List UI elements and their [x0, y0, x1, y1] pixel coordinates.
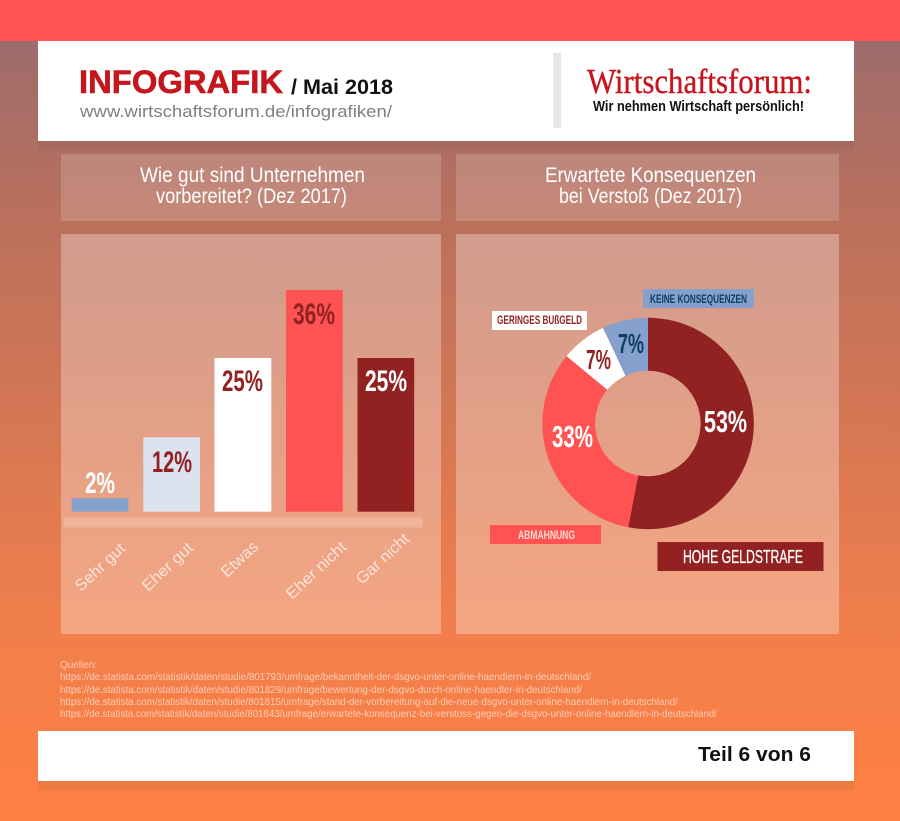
title: INFOGRAFIK [79, 64, 283, 100]
bar: Eher gut [143, 437, 200, 512]
legend: Keine Konsequenzen: KEINE KONSEQUENZEN [650, 292, 747, 306]
axis labels: Eher gut [139, 539, 197, 595]
heading panel: preparedness [61, 154, 441, 221]
footer shadow [38, 781, 854, 790]
logo: Wir nehmen Wirtschaft persönlich! [593, 98, 804, 115]
footer panel [38, 731, 854, 781]
bar: Sehr gut: 2% [85, 467, 115, 500]
website url: www.wirtschaftsforum.de/infografiken/ [79, 102, 392, 121]
value: 33%: 33% [552, 419, 593, 454]
bar: Eher nicht: 36% [293, 298, 335, 331]
footer panel: Teil 6 von 6 [698, 744, 811, 766]
donut segment: Hohe Geldstrafe 53% [628, 318, 754, 529]
header shadow [38, 141, 854, 149]
legend: Abmahnung: ABMAHNUNG [518, 528, 575, 542]
value: 7% white segment: 7% [586, 344, 611, 375]
sources: https://de.statista.com/statistik/daten/studie/801815/umfrage/stand-der-vorbereitung-auf-die-neue-dsgvo-unter-online-haendlern-in-deutschland/ [60, 696, 678, 708]
axis labels: Gar nicht [353, 530, 413, 588]
legend: Hohe Geldstrafe: HOHE GELDSTRAFE [683, 547, 803, 567]
heading panel: preparedness: Wie gut sind Unternehmen [140, 164, 365, 187]
axis labels [72, 530, 413, 603]
sources: https://de.statista.com/statistik/daten/studie/801829/umfrage/bewertung-der-dsgvo-durch-online-haendler-in-deutschland/ [60, 684, 582, 696]
bar: Sehr gut [72, 467, 128, 512]
axis band [64, 518, 422, 528]
bar: Etwas [214, 358, 271, 512]
panel: donut chart [456, 234, 839, 634]
bar: Eher gut: 12% [152, 446, 192, 479]
legend: Hohe Geldstrafe [658, 542, 824, 571]
header panel [38, 41, 854, 141]
donut segment: Abmahnung 33% [542, 356, 638, 527]
heading panel: consequences: Erwartete Konsequenzen [545, 164, 756, 187]
heading panel: consequences: bei Verstoß (Dez 2017) [559, 185, 742, 208]
axis labels: Sehr gut [72, 540, 129, 595]
bar: Eher nicht [286, 290, 343, 512]
logo [587, 62, 812, 115]
donut segment: Keine Konsequenzen 7% [603, 318, 648, 376]
divider [553, 53, 561, 128]
legend: Geringes Bußgeld: GERINGES BUßGELD [497, 313, 582, 327]
heading panel: preparedness: vorbereitet? (Dez 2017) [156, 185, 347, 208]
sources: https://de.statista.com/statistik/daten/studie/801843/umfrage/erwartete-konsequenz-bei-verstoss-gegen-die-dsgvo-unter-online-haendlern-in-deutschland/ [60, 708, 717, 720]
axis labels: Etwas [218, 538, 262, 581]
logo: Wirtschaftsforum: [587, 62, 812, 101]
bar: Gar nicht: 25% [365, 365, 407, 398]
donut segment: Geringes Bußgeld 7% [567, 328, 626, 390]
sources [60, 659, 717, 720]
legend: Abmahnung [490, 525, 601, 544]
bar: Gar nicht [358, 358, 414, 512]
axis labels: Eher nicht [283, 538, 351, 603]
heading panel: consequences [456, 154, 839, 221]
bar: Etwas: 25% [222, 365, 263, 398]
top band [0, 0, 900, 41]
date: / Mai 2018 [291, 76, 393, 99]
panel: bar chart [61, 234, 441, 634]
legend: Keine Konsequenzen [643, 289, 754, 308]
sources: Quellen: [60, 659, 97, 671]
value: 7% blue segment: 7% [618, 328, 644, 359]
value: 53%: 53% [704, 404, 747, 439]
sources: https://de.statista.com/statistik/daten/studie/801793/umfrage/bekanntheit-der-dsgvo-unter-online-haendlern-in-deutschland/ [60, 671, 591, 683]
legend: Geringes Bußgeld [492, 311, 587, 330]
